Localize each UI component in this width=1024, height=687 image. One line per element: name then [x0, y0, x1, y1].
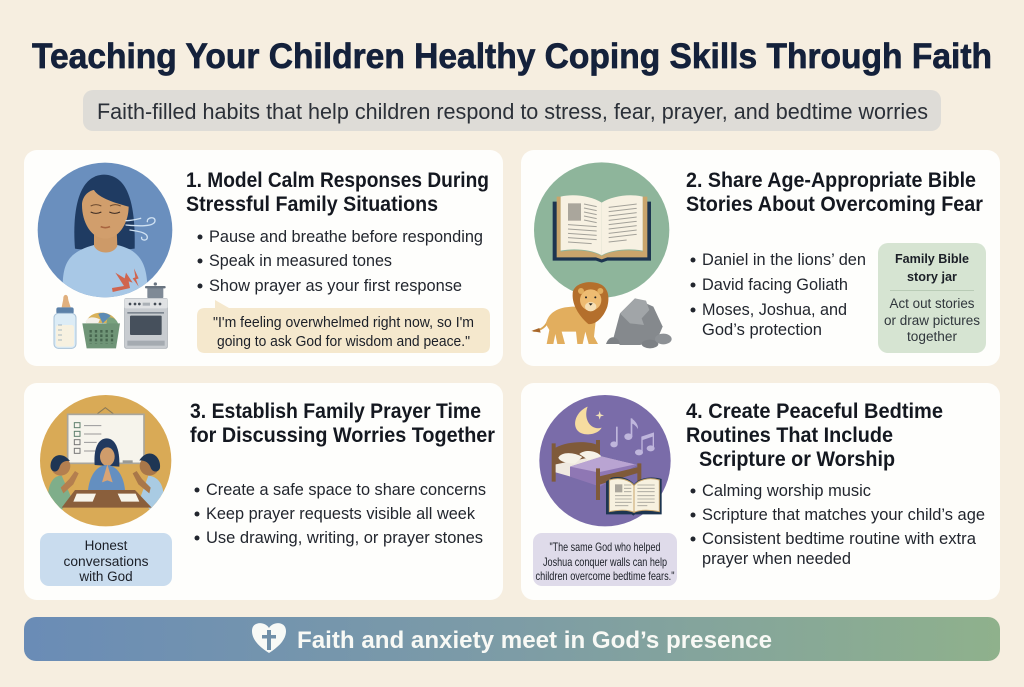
heading — [186, 168, 489, 216]
banner — [24, 617, 1000, 661]
bullet list — [194, 480, 486, 547]
heading: for Discussing Worries Together — [190, 423, 496, 447]
icon: heart with cross — [252, 623, 286, 653]
title: Teaching Your Children Healthy Coping Skills Through Faith — [32, 37, 992, 76]
callout: Joshua quote — [533, 533, 677, 586]
callout: honest conversations: Honest — [85, 538, 128, 553]
callout: quote — [197, 300, 490, 353]
callout: quote: "I'm feeling overwhelmed right now, so I'm — [213, 315, 474, 331]
bullet list: Use drawing, writing, or prayer stones — [206, 528, 483, 547]
callout: story jar: together — [907, 329, 957, 344]
panel: Bible stories — [521, 150, 1000, 366]
woman — [94, 438, 119, 467]
callout: quote: going to ask God for wisdom and peace." — [217, 334, 470, 350]
bullet list: Show prayer as your first response — [209, 276, 462, 295]
icon: open book — [606, 477, 662, 516]
boy right — [140, 476, 164, 512]
panel: model calm responses — [24, 150, 503, 366]
bullet list: Calming worship music — [702, 481, 871, 500]
icon: open Bible with lion and rock — [531, 162, 672, 348]
callout: honest conversations — [40, 533, 172, 586]
heading: 2. Share Age-Appropriate Bible — [686, 168, 976, 192]
table — [62, 490, 152, 508]
heading — [686, 168, 984, 216]
callout: Joshua quote: children overcome bedtime fears." — [536, 569, 674, 583]
icon: calm mother with household items — [38, 163, 172, 348]
subtitle pill — [83, 90, 941, 131]
panel: bedtime routines — [521, 383, 1000, 600]
heading — [190, 399, 496, 447]
bullet list — [198, 227, 483, 295]
bullet list: Moses, Joshua, and — [702, 300, 847, 319]
bullet list: Pause and breathe before responding — [209, 227, 483, 246]
heading: 1. Model Calm Responses During — [186, 168, 489, 192]
callout: honest conversations: with God — [78, 569, 133, 584]
icon: baby bottle — [54, 295, 76, 348]
bullet list: Create a safe space to share concerns — [206, 480, 486, 499]
bullet list: Consistent bedtime routine with extra — [702, 529, 977, 548]
bullet list: David facing Goliath — [702, 275, 848, 294]
icon: stress bolts — [112, 268, 139, 292]
callout: Joshua quote: "The same God who helped — [550, 540, 660, 554]
boy left — [48, 476, 72, 512]
callout: Joshua quote: Joshua conquer walls can help — [543, 555, 667, 569]
heading: 3. Establish Family Prayer Time — [190, 399, 481, 423]
callout: story jar: story jar — [907, 269, 957, 284]
callout: story jar — [878, 243, 986, 353]
icon: music notes — [610, 418, 655, 455]
callout: story jar: or draw pictures — [884, 313, 980, 328]
bullet list: God’s protection — [702, 320, 822, 339]
callout: story jar: Act out stories — [890, 296, 975, 311]
callout: honest conversations: conversations — [64, 554, 149, 569]
bullet list — [690, 250, 866, 339]
icon: stove with pot — [125, 282, 167, 348]
bullet list: prayer when needed — [702, 549, 851, 568]
subtitle pill: Faith-filled habits that help children respond to stress, fear, prayer, and bedtime worries — [97, 99, 928, 124]
icon: open book — [553, 195, 651, 263]
heading: Scripture or Worship — [699, 447, 895, 471]
icon: breath lines — [126, 218, 155, 240]
bullet list: Speak in measured tones — [209, 251, 392, 270]
callout: story jar: Family Bible — [895, 251, 969, 266]
bullet list — [690, 481, 985, 568]
icon: lion — [531, 282, 608, 344]
bullet list: Keep prayer requests visible all week — [206, 504, 475, 523]
heading: 4. Create Peaceful Bedtime — [686, 399, 943, 423]
heading: Stressful Family Situations — [186, 192, 438, 216]
banner text: Faith and anxiety meet in God’s presence — [297, 627, 772, 654]
icon: bed, moon, music and book — [539, 395, 671, 526]
icon: moon — [575, 407, 602, 434]
icon: laundry basket — [82, 313, 120, 348]
heading: Stories About Overcoming Fear — [686, 192, 984, 216]
icon: rock — [606, 298, 672, 348]
panel: family prayer time — [24, 383, 503, 600]
bullet list: Scripture that matches your child’s age — [702, 505, 985, 524]
icon: bed — [552, 440, 641, 500]
icon: family praying at table — [40, 395, 171, 526]
bullet list: Daniel in the lions’ den — [702, 250, 866, 269]
heading — [686, 399, 943, 471]
heading: Routines That Include — [686, 423, 893, 447]
